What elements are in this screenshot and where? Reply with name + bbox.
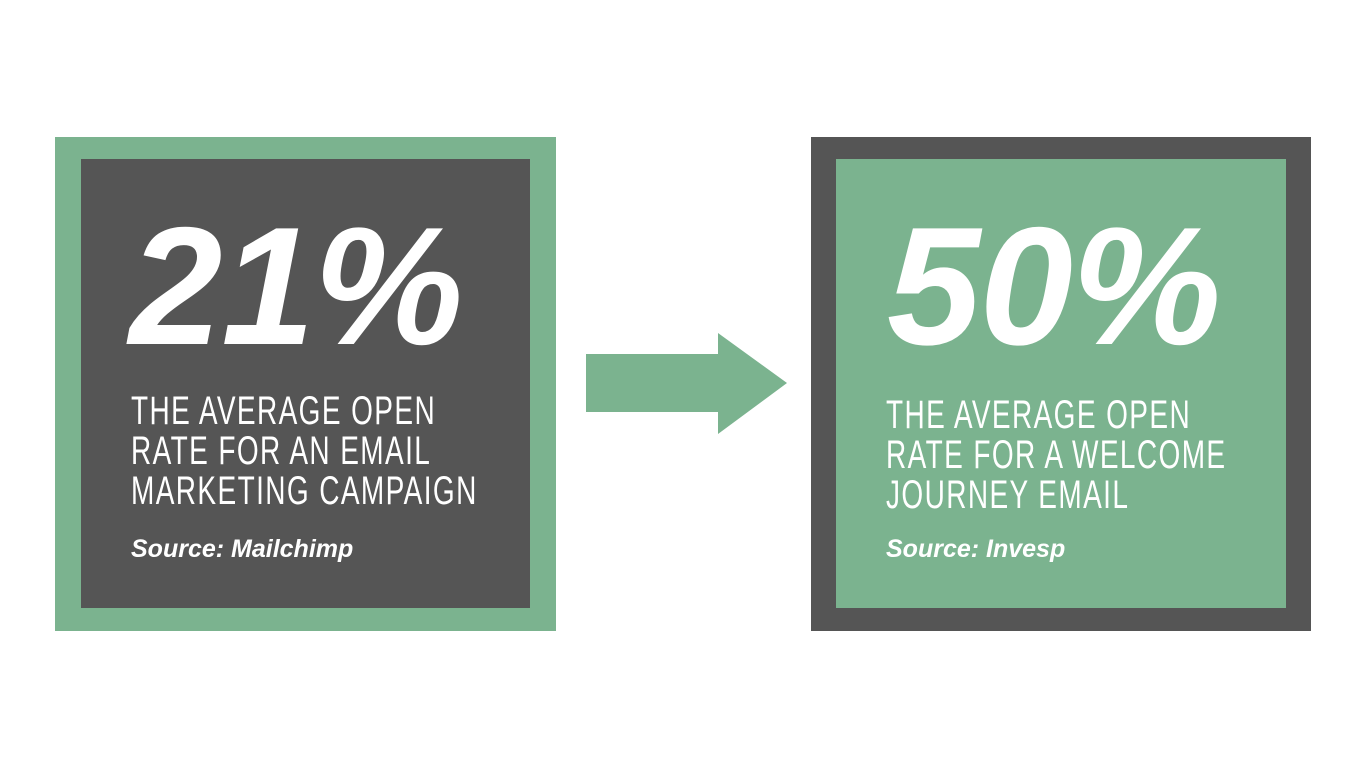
big number 50%: 50% xyxy=(887,192,1220,380)
description text: MARKETING CAMPAIGN xyxy=(131,469,478,513)
big number 21%: 21% xyxy=(129,192,462,380)
description text xyxy=(886,393,1227,517)
description text: RATE FOR AN EMAIL xyxy=(131,429,431,473)
panel: right stat 50% xyxy=(811,137,1311,631)
inner dark box xyxy=(81,159,530,608)
description text xyxy=(131,389,478,513)
source text: Source: Mailchimp xyxy=(131,535,353,563)
source text: Source: Invesp xyxy=(886,535,1065,563)
description text: RATE FOR A WELCOME xyxy=(886,433,1227,477)
description text: THE AVERAGE OPEN xyxy=(131,389,436,433)
description text: THE AVERAGE OPEN xyxy=(886,393,1191,437)
inner green box xyxy=(836,159,1286,608)
arrow xyxy=(586,333,787,434)
description text: JOURNEY EMAIL xyxy=(886,473,1129,517)
panel: left stat 21% xyxy=(55,137,556,631)
